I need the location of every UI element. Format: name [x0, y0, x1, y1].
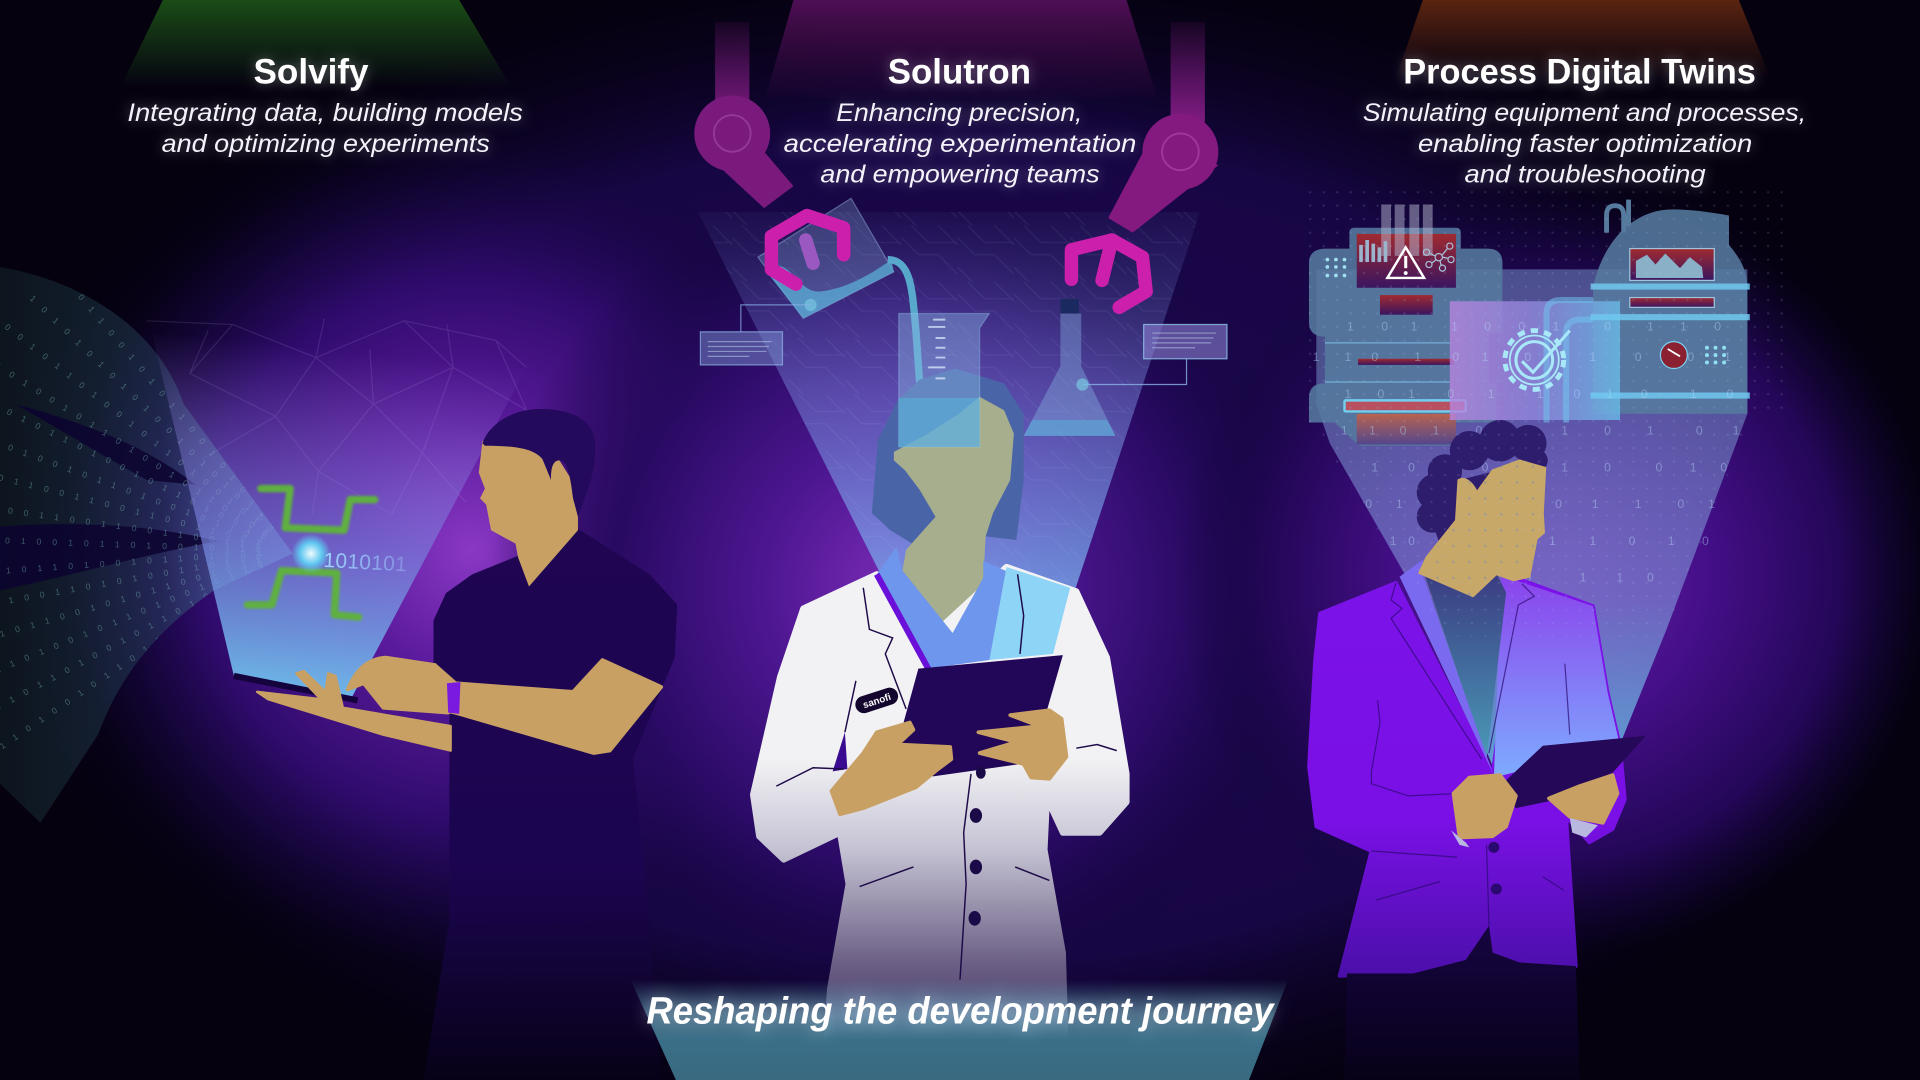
tablet	[1500, 736, 1646, 808]
face	[1419, 460, 1545, 596]
binary stream: 0010110100101101001011	[3, 322, 281, 542]
robot arm left	[694, 22, 793, 208]
binary stream: 0101100101011001010110	[56, 268, 285, 539]
binary overlay: 10101101010	[1344, 387, 1734, 401]
text: Solutron description	[784, 99, 1136, 188]
test tubes	[1381, 204, 1433, 256]
beaker	[899, 313, 989, 447]
bar chart	[1359, 240, 1387, 262]
data dots overlay	[1298, 184, 1794, 637]
data fan with binary digits	[0, 267, 293, 823]
tank small screen	[1630, 298, 1714, 307]
glow: right spotlight	[1176, 110, 1920, 1041]
left hand	[831, 722, 951, 814]
top light: magenta	[765, 0, 1157, 98]
left hand	[1453, 775, 1516, 838]
coat buttons	[969, 767, 986, 926]
hexagon grid	[147, 318, 527, 514]
tank	[1593, 209, 1747, 414]
binary overlay	[1313, 320, 1740, 585]
glowing orb	[291, 534, 331, 573]
heading: Process Digital Twins: Process Digital Twins	[1403, 51, 1756, 91]
heading: Solvify: Solvify	[253, 51, 369, 91]
binary label: 1010101	[323, 549, 407, 576]
gear check icon	[1505, 331, 1570, 389]
man: open hand	[257, 671, 451, 751]
gripper right	[1071, 240, 1146, 307]
text: Process Digital Twins description: enabling faster optimization	[1418, 130, 1752, 158]
binary overlay: 11010010101	[1341, 424, 1740, 438]
jacket lit side	[1494, 576, 1620, 778]
info box left	[700, 305, 811, 365]
blouse	[877, 547, 1016, 669]
tagline: Reshaping the development journey	[647, 991, 1275, 1033]
left cuff	[1451, 830, 1469, 847]
top light: orange	[1396, 0, 1771, 78]
dot grid right	[1705, 346, 1726, 364]
heading: Solutron: Solutron	[888, 51, 1031, 91]
text: Solutron description: accelerating experimentation	[784, 130, 1136, 158]
centre twin panel	[1450, 301, 1620, 420]
man: polo shirt	[435, 530, 676, 922]
woman: hair	[872, 369, 1024, 544]
coat seams	[776, 574, 1117, 980]
bottom light	[631, 980, 1288, 1080]
flask	[1024, 299, 1116, 436]
laptop light beam	[152, 333, 529, 700]
top light: green	[120, 0, 512, 88]
tank top pipe	[1607, 200, 1629, 233]
jacket seams	[1371, 583, 1570, 926]
binary overlay: 01101101	[1365, 497, 1715, 511]
glow: left spotlight	[55, 135, 888, 967]
left machine	[1309, 228, 1502, 446]
binary overlay: 1011010	[1390, 534, 1709, 548]
badge	[853, 685, 900, 715]
face dots	[1419, 460, 1545, 596]
jacket buttons	[1488, 842, 1502, 894]
circuit pattern	[698, 212, 1200, 669]
text: Process Digital Twins description: and troubleshooting	[1464, 160, 1706, 188]
info box right	[1076, 324, 1227, 391]
light beam	[1316, 269, 1747, 775]
watch	[447, 682, 460, 714]
text: Process Digital Twins description	[1363, 99, 1806, 188]
binary stream: 1010101010100101010101	[28, 293, 285, 542]
right cuff	[1570, 818, 1598, 838]
panel: Solvify illustration	[0, 267, 676, 1080]
tank screen	[1630, 249, 1714, 280]
man: hair	[482, 409, 595, 517]
lab coat	[753, 567, 1127, 1080]
purple lapel edge	[877, 574, 928, 669]
pouring beaker	[758, 198, 921, 399]
right lapel	[989, 567, 1070, 660]
panel: Solutron illustration	[694, 22, 1227, 1080]
pipes	[1547, 287, 1750, 422]
right hand	[1549, 775, 1618, 823]
glow: centre spotlight	[490, 98, 1322, 1078]
curly hair	[1417, 420, 1548, 541]
dot grid left	[1326, 258, 1346, 277]
text: Solutron description: and empowering teams	[820, 160, 1100, 188]
network icon	[1423, 243, 1454, 271]
binary overlay: 10110010110	[1347, 320, 1721, 334]
gripper left	[771, 216, 844, 284]
tablet	[898, 655, 1063, 776]
robot arm right	[1108, 22, 1218, 233]
laptop base	[234, 676, 358, 700]
man: pointing hand	[348, 658, 448, 713]
left lapel	[1400, 560, 1493, 773]
woman: face and neck	[894, 397, 1014, 633]
man: neck and face	[479, 441, 578, 587]
binary overlay: 11010101001	[1313, 350, 1731, 364]
binary stream	[0, 288, 274, 749]
text: Solvify description	[127, 99, 523, 158]
binary overlay: 010110	[1408, 571, 1654, 585]
text: Solvify description: Integrating data, building models	[127, 99, 523, 127]
man: trousers	[424, 912, 661, 1080]
text: Process Digital Twins description: Simulating equipment and processes,	[1363, 99, 1806, 127]
right hand	[978, 710, 1067, 779]
text: Solvify description: and optimizing experiments	[162, 130, 490, 158]
light beam	[698, 212, 1200, 669]
shirt	[1423, 569, 1506, 759]
badge: sanofi	[862, 692, 893, 711]
warning icon	[1387, 247, 1424, 278]
binary overlay: 1010110010	[1371, 460, 1727, 474]
green symbol	[247, 489, 375, 617]
panel: Process Digital Twins illustration	[1309, 200, 1750, 1080]
text: Solutron description: Enhancing precision,	[836, 99, 1082, 127]
gauge	[1660, 342, 1687, 369]
man: forearm	[435, 660, 661, 753]
dark wedges	[0, 404, 218, 590]
purple coat gap	[833, 732, 847, 771]
jacket	[1309, 579, 1625, 976]
trousers	[1344, 926, 1580, 1080]
